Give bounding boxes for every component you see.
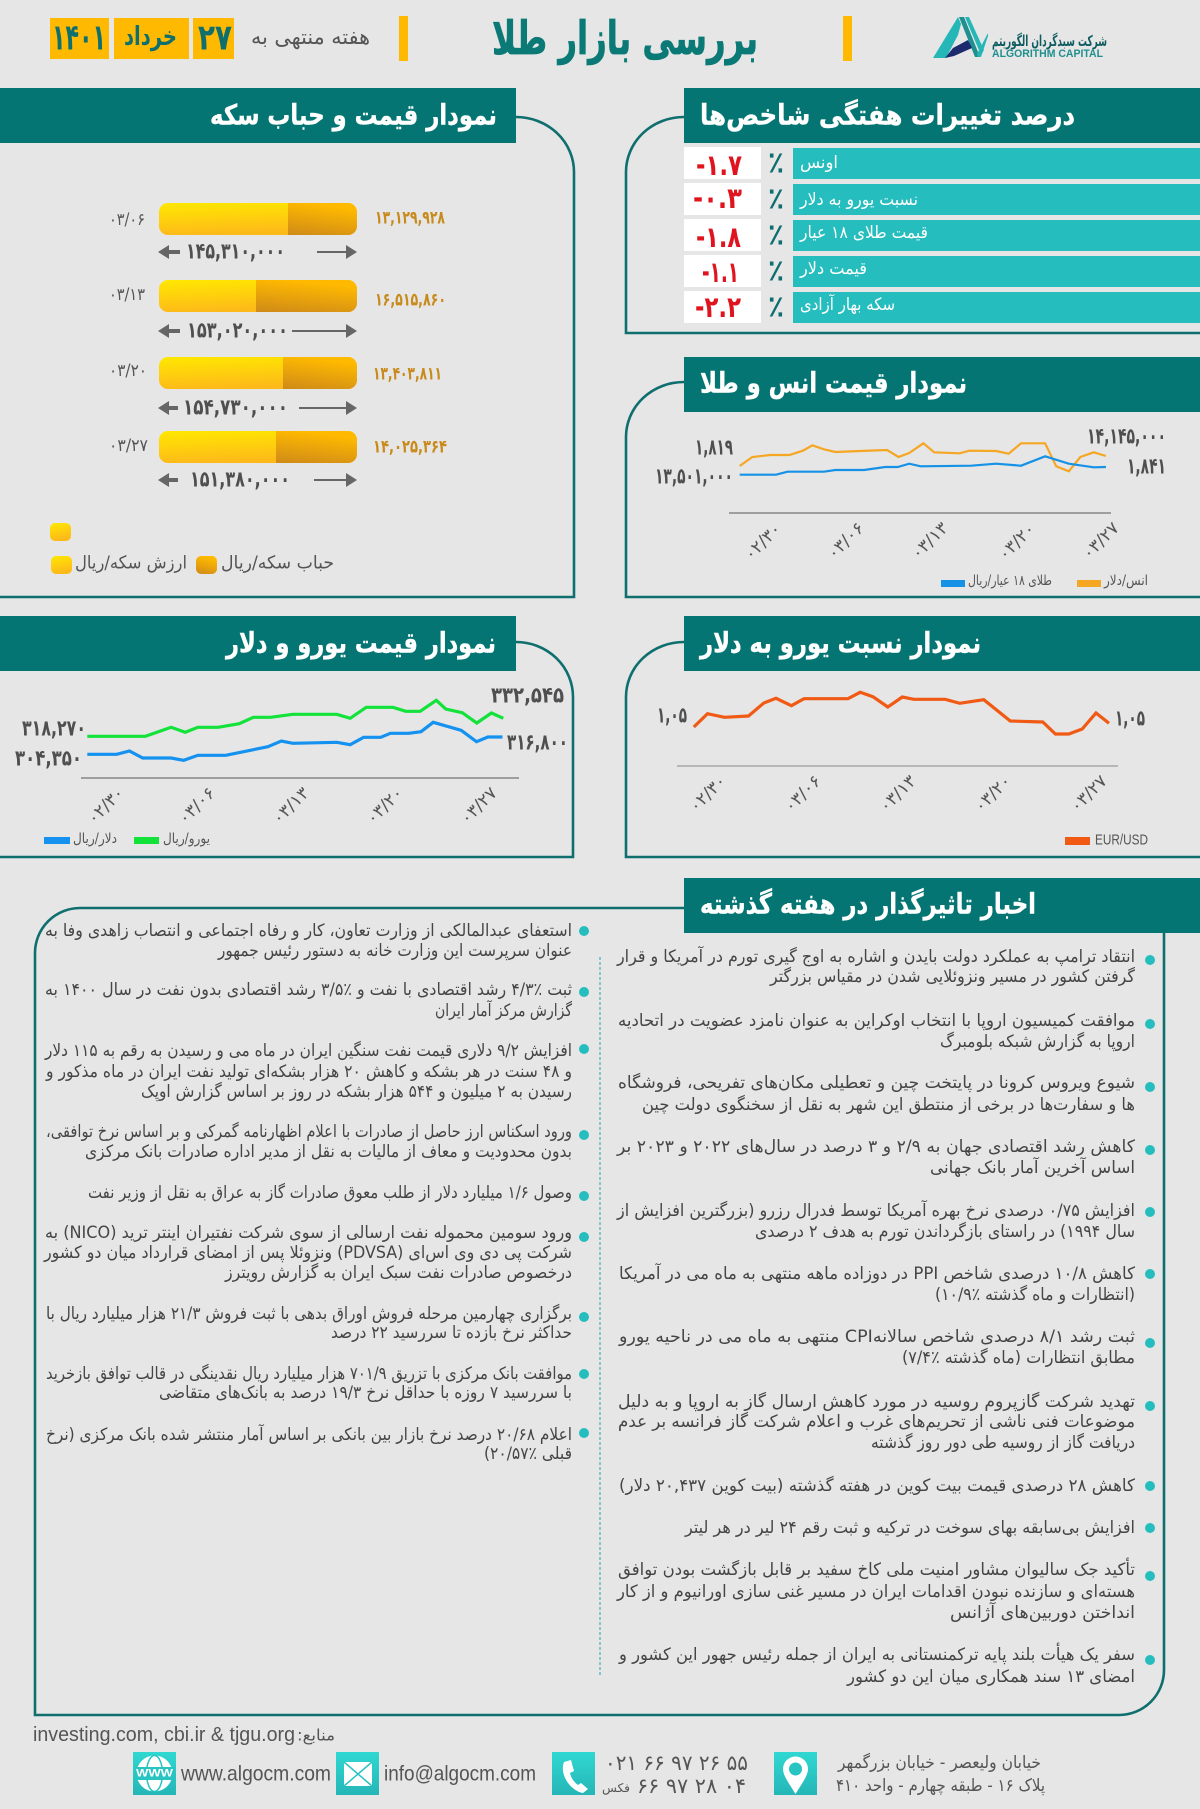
news right 11: تأکید جک سالیوان مشاور امنیت ملی کاخ سفید بر قابل بازگشت بودن توافق (618, 1557, 1135, 1580)
news right 11: انداختن دوربین‌های آژانس (950, 1601, 1135, 1623)
value labels: ounce and gold: ۱,۸۱۹ (695, 436, 733, 460)
row: Bahar Azadi coin: سکه بهار آزادی (800, 293, 895, 315)
news right 12 (618, 1642, 1155, 1687)
bar: 03/20: ۱۵۴,۷۳۰,۰۰۰ (183, 396, 288, 420)
row: euro to dollar (684, 181, 1200, 216)
axis dates: ounce and gold: ۰۳/۱۳ (907, 518, 953, 564)
bar: 03/20: ۱۳,۴۰۳,۸۱۱ (373, 364, 442, 384)
legend: euro and dollar: یورو/ریال (163, 831, 210, 847)
panel: ounce and gold price chart (626, 357, 1200, 597)
news left 3: افزایش ۹/۲ دلاری قیمت نفت سنگین ایران در ماه می و رسیدن به رقم به ۱۱۵ دلار (44, 1040, 572, 1061)
news right 7: مطابق انتظارات (ماه گذشته ٪۷/۴) (902, 1347, 1135, 1368)
news left 6: ورود سومین محموله نفت ارسالی از سوی شرکت نفتیران اینتر ترید (NICO) به (45, 1223, 572, 1243)
row: dollar: ٪ (768, 254, 784, 288)
news left 9: قبلی ٪۲۰/۵۷) (484, 1444, 572, 1464)
value labels: ounce and gold: ۱,۸۴۱ (1127, 454, 1166, 480)
row: euro to dollar: ٪ (768, 182, 784, 216)
heading: euro to dollar ratio: نمودار نسبت یورو به دلار (698, 626, 981, 660)
news right 7 (618, 1327, 1155, 1368)
sources line: investing.com, cbi.ir & tjgu.org (33, 1724, 295, 1746)
news right 6: (انتظارات و ماه گذشته ٪۱۰/۹) (935, 1284, 1135, 1305)
bar: 03/20: ۰۳/۲۰ (109, 361, 147, 381)
legend: ounce and gold: انس/دلار (1103, 573, 1148, 589)
news left 6 (43, 1223, 589, 1283)
bar: 03/06 (109, 203, 445, 264)
row: Bahar Azadi coin: ٪ (768, 290, 784, 324)
value labels: ounce and gold: ۱۳,۵۰۱,۰۰۰ (655, 464, 733, 490)
news right 6 (619, 1262, 1155, 1305)
news left 8 (46, 1363, 589, 1403)
news left 5: وصول ۱/۶ میلیارد دلار از طلب معوق صادرات گاز به عراق به نقل از وزیر نفت (88, 1182, 572, 1203)
row: dollar (684, 254, 1200, 289)
address: خیابان ولیعصر - خیابان بزرگمهر (837, 1752, 1041, 1773)
news right 1: گرفتن کشور در مسیر ونزوئلایی شدن در مقیاس بزرگتر (769, 966, 1136, 987)
heading: ounce and gold: نمودار قیمت انس و طلا (700, 366, 967, 400)
news right 3 (618, 1072, 1155, 1115)
news right 3: شیوع ویروس کرونا در پایتخت چین و تعطیلی مکان‌های تفریحی، فروشگاه (618, 1072, 1135, 1093)
row: ounce: -۱.۷ (696, 148, 742, 182)
news left 1: عنوان سرپرست این وزارت خانه به دستور رئیس جمهور (217, 941, 572, 961)
icon: globe (133, 1752, 176, 1795)
news right 5: افزایش ۰/۷۵ درصدی نرخ بهره آمریکا توسط فدرال رزرو (بزرگترین افزایش از (616, 1199, 1135, 1221)
axis dates: ounce and gold (740, 518, 1124, 565)
legend: ounce and gold (941, 573, 1148, 589)
axis dates: EUR/USD: ۰۳/۱۳ (875, 771, 921, 817)
title: بررسی بازار طلا (492, 11, 758, 65)
row: 18k gold: -۱.۸ (696, 220, 741, 254)
axis dates: euro and dollar: ۰۳/۰۶ (174, 783, 220, 829)
email: info@algocm.com (384, 1762, 536, 1786)
news right 4: اساس آخرین آمار بانک جهانی (930, 1156, 1135, 1178)
row: 18k gold (684, 218, 1200, 254)
row: Bahar Azadi coin: -۲.۲ (695, 290, 741, 324)
bar: 03/27 (109, 431, 447, 492)
legend: coin chart: حباب سکه/ریال (221, 552, 334, 574)
value labels: euro and dollar: ۳۱۶,۸۰۰ (507, 730, 568, 756)
axis dates: euro and dollar: ۰۳/۱۳ (268, 783, 314, 829)
legend: ounce and gold: طلای ۱۸ عیار/ریال (968, 573, 1052, 589)
bar: 03/27: ۰۳/۲۷ (109, 436, 148, 456)
bar: 03/13: ۱۶,۵۱۵,۸۶۰ (375, 290, 446, 310)
axis dates: euro and dollar: ۰۲/۳۰ (83, 783, 129, 829)
icon: mail (336, 1752, 379, 1795)
bar: 03/20 (109, 357, 442, 420)
news right 1 (616, 945, 1155, 987)
header: date boxes: هفته منتهی به (251, 25, 370, 49)
row: 18k gold: ٪ (768, 218, 784, 252)
news left 4 (46, 1121, 589, 1162)
line chart: EUR/USD (677, 692, 1118, 766)
bar: 03/13: ۰۳/۱۳ (109, 285, 145, 305)
news left 2: گزارش مرکز آمار ایران (435, 999, 573, 1021)
line chart: ounce and gold (729, 443, 1111, 513)
value labels: EUR/USD: ۱,۰۵ (1115, 706, 1145, 732)
news left 8: موافقت بانک مرکزی با تزریق ۷۰۱/۹ هزار میلیارد ریال نقدینگی در قالب توافق بازخرید (46, 1363, 572, 1384)
panel: euro to dollar ratio chart (626, 616, 1200, 857)
axis dates: euro and dollar: ۰۳/۲۷ (456, 783, 502, 829)
news right 5: سال ۱۹۹۴) در راستای بازگرداندن تورم به هدف ۲ درصدی (755, 1221, 1135, 1242)
header: accent bar left (399, 16, 408, 61)
icon: globe: WWW (136, 1768, 174, 1780)
logo: Algorithm Capital (933, 17, 1107, 60)
news right 3: ها و سفارت‌ها در برخی از منتطق این شهر به نقل از سخنگوی دولت چین (642, 1094, 1135, 1115)
news left 6: شرکت پی دی وی اس‌ای (PDVSA) ونزوئلا پس از امضای قرارداد میان دو کشور (43, 1243, 572, 1263)
news left 9 (46, 1423, 589, 1464)
news right 1: انتقاد ترامپ به عملکرد دولت بایدن و اشاره به اوج گیری تورم در آمریکا و قرار (616, 945, 1135, 967)
axis dates: ounce and gold: ۰۳/۲۷ (1078, 518, 1124, 564)
news right 11 (616, 1557, 1155, 1623)
value labels: euro and dollar: ۳۱۸,۲۷۰ (22, 716, 86, 742)
row: ounce: ٪ (768, 146, 784, 180)
heading: news: اخبار تاثیرگذار در هفته گذشته (700, 888, 1036, 920)
header: accent bar right (843, 16, 852, 61)
row: 18k gold: قیمت طلای ۱۸ عیار (799, 223, 928, 243)
axis dates: ounce and gold: ۰۳/۰۶ (823, 518, 869, 564)
heading: euro and dollar: نمودار قیمت یورو و دلار (224, 626, 496, 660)
value labels: EUR/USD (657, 704, 1145, 732)
news right 7: ثبت رشد ۸/۱ درصدی شاخص سالانهCPI منتهی به ماه می در ناحیه یورو (618, 1327, 1135, 1347)
news left 3: و ۴۸ سنت در هر بشکه و کاهش ۲۰ هزار بشکه‌ای تولید نفت ایران در ماه مذکور و (45, 1062, 572, 1082)
legend: coin chart (50, 523, 334, 574)
phone numbers: ۰۲۱ ۶۶ ۹۷ ۲۶ ۵۵ (605, 1751, 748, 1775)
axis dates: EUR/USD: ۰۳/۲۰ (970, 771, 1016, 817)
news right 4: کاهش رشد اقتصادی جهان به ۲/۹ و ۳ درصد در سال‌های ۲۰۲۲ و ۲۰۲۳ بر (616, 1137, 1136, 1157)
header: date boxes: ۱۴۰۱ (52, 18, 106, 58)
logo: Algorithm Capital: شرکت سبدگردان الگوریتم (992, 32, 1107, 50)
panel: influential news of past week (35, 878, 1200, 1715)
axis dates: euro and dollar (83, 783, 502, 829)
news left 3 (44, 1040, 589, 1102)
value labels: ounce and gold (655, 424, 1166, 490)
phone numbers (602, 1751, 748, 1798)
legend: euro and dollar (44, 831, 210, 847)
panel: coin price and bubble (0, 88, 574, 597)
news left 4: بدون محدودیت و معاف از مالیات به نقل از مدیر اداره صادرات بانک مرکزی (85, 1142, 572, 1162)
value labels: euro and dollar: ۳۳۲,۵۴۵ (491, 684, 564, 708)
row: dollar: -۱.۱ (702, 255, 739, 289)
axis dates: EUR/USD: ۰۳/۲۷ (1066, 771, 1112, 817)
news right 4 (616, 1137, 1155, 1178)
axis dates: ounce and gold: ۰۳/۲۰ (994, 519, 1040, 565)
axis dates: EUR/USD: ۰۲/۳۰ (685, 771, 731, 817)
panel: weekly change of indices (626, 88, 1200, 333)
heading: weekly changes: درصد تغییرات هفتگی شاخص‌ها (700, 98, 1075, 132)
axis dates: euro and dollar: ۰۳/۲۰ (362, 783, 408, 829)
icon: location pin (774, 1752, 817, 1795)
news right 2: موافقت کمیسیون اروپا با انتخاب اوکراین به عنوان نامزد عضویت در اتحادیه (618, 1011, 1135, 1031)
news right 2: اروپا به گزارش شبکه بلومبرگ (940, 1031, 1135, 1052)
news left 1 (45, 921, 589, 961)
header: date boxes: خرداد (124, 22, 177, 52)
axis dates: ounce and gold: ۰۲/۳۰ (740, 519, 786, 565)
header: date boxes: ۲۷ (198, 18, 232, 58)
header: date boxes (50, 18, 370, 59)
news right 8: موضوعات فنی ناشی از تحریم‌های غرب و اعلام شرکت گاز فرانسه بر عدم (618, 1411, 1135, 1432)
news left 2 (45, 980, 589, 1021)
heading: coin chart: نمودار قیمت و حباب سکه (210, 98, 497, 132)
news right 5 (616, 1199, 1155, 1242)
bar: 03/27: ۱۴,۰۲۵,۳۶۴ (373, 436, 447, 458)
news right 12: سفر یک هیأت بلند پایه ترکمنستانی به ایران از جمله رئیس جهور این کشور و (618, 1642, 1135, 1665)
bar: 03/13: ۱۵۳,۰۲۰,۰۰۰ (187, 318, 288, 344)
news left 2: ثبت ٪۴/۳ رشد اقتصادی با نفت و ٪۳/۵ رشد اقتصادی بدون نفت در سال ۱۴۰۰ به (45, 980, 572, 1000)
news left 7: حداکثر نرخ بازده تا سررسید ۲۲ درصد (331, 1323, 572, 1343)
news left 7 (46, 1303, 589, 1343)
address (836, 1752, 1045, 1796)
row: ounce: اونس (800, 153, 838, 173)
panel: euro and dollar price chart (0, 616, 573, 857)
phone numbers: فکس (602, 1781, 630, 1796)
icon: phone (552, 1752, 595, 1795)
news right 10: افزایش بی‌سابقه بهای سوخت در ترکیه و ثبت رقم ۲۴ لیر در هر لیتر (684, 1518, 1135, 1538)
news left 6: درخصوص صادرات نفت سبک ایران به گزارش رویترز (224, 1262, 572, 1283)
row: euro to dollar: نسبت یورو به دلار (799, 190, 918, 210)
legend: coin chart: ارزش سکه/ریال (75, 552, 187, 574)
row: euro to dollar: -۰.۳ (693, 181, 742, 215)
news left 9: اعلام ۲۰/۶۸ درصد نرخ بازار بین بانکی بر اساس آمار منتشر شده بانک مرکزی (نرخ (46, 1423, 572, 1445)
logo: Algorithm Capital: ALGORITHM CAPITAL (992, 48, 1103, 60)
news left 1: استعفای عبدالمالکی از وزارت تعاون، کار و رفاه اجتماعی و انتصاب زاهدی وفا به (45, 921, 572, 941)
news left 4: ورود اسکناس ارز حاصل از صادرات با اعلام اظهارنامه گمرکی و بر اساس نرخ توافقی، (46, 1121, 572, 1142)
news left 7: برگزاری چهارمین مرحله فروش اوراق بدهی با ثبت فروش ۲۱/۳ هزار میلیارد ریال با (46, 1303, 572, 1324)
value labels: EUR/USD: ۱,۰۵ (657, 704, 687, 728)
sources line: منابع: (297, 1726, 335, 1746)
news right 2 (618, 1011, 1155, 1052)
news right 11: هسته‌ای و سازنده نبودن اقدامات ایران در مسیر غنی سازی اورانیوم و از کار (616, 1582, 1135, 1602)
news right 12: امضای ۱۳ سند همکاری میان این دو کشور (846, 1667, 1135, 1687)
phone numbers: ۶۶ ۹۷ ۲۸ ۰۴ (637, 1774, 746, 1798)
bar: 03/27: ۱۵۱,۳۸۰,۰۰۰ (190, 468, 290, 492)
news left 8: با سررسید ۷ روزه با حداقل نرخ ۱۹/۳ درصد به بانک‌های متقاضی (159, 1383, 572, 1403)
address: پلاک ۱۶ - طبقه چهارم - واحد ۴۱۰ (836, 1776, 1045, 1796)
row: Bahar Azadi coin (684, 290, 1200, 324)
axis dates: EUR/USD (685, 771, 1112, 817)
legend: EUR/USD (1065, 832, 1148, 848)
news right 8 (618, 1391, 1155, 1453)
row: ounce (684, 146, 1200, 182)
bar: 03/13 (109, 280, 446, 344)
news right 8: دریافت گاز از روسیه طی دور روز گذشته (871, 1432, 1135, 1453)
row: dollar: قیمت دلار (799, 259, 867, 279)
bar: 03/06: ۰۳/۰۶ (109, 210, 145, 230)
website: www.algocm.com (180, 1762, 331, 1786)
news right 6: کاهش ۱۰/۸ درصدی شاخص PPI در دوزاده ماهه منتهی به ماه می در آمریکا (619, 1262, 1136, 1284)
news right 8: تهدید شرکت گازپروم روسیه در مورد کاهش ارسال گاز به اروپا و به دلیل (618, 1391, 1135, 1412)
value labels: euro and dollar (15, 684, 568, 772)
news right 9: کاهش ۲۸ درصدی قیمت بیت کوین در هفته گذشته (بیت کوین ۲۰,۴۳۷ دلار) (619, 1475, 1136, 1496)
legend: euro and dollar: دلار/ریال (73, 831, 117, 847)
line chart: euro and dollar (81, 700, 519, 778)
axis dates: EUR/USD: ۰۳/۰۶ (780, 771, 826, 817)
news left 3: رسیدن به ۲ میلیون و ۵۴۴ هزار بشکه در روز بر اساس گزارش اوپک (141, 1081, 572, 1102)
legend: EUR/USD: EUR/USD (1095, 832, 1148, 848)
bar: 03/06: ۱۴۵,۳۱۰,۰۰۰ (186, 240, 285, 264)
bar: 03/06: ۱۳,۱۲۹,۹۲۸ (375, 208, 445, 228)
value labels: euro and dollar: ۳۰۴,۳۵۰ (15, 746, 82, 772)
